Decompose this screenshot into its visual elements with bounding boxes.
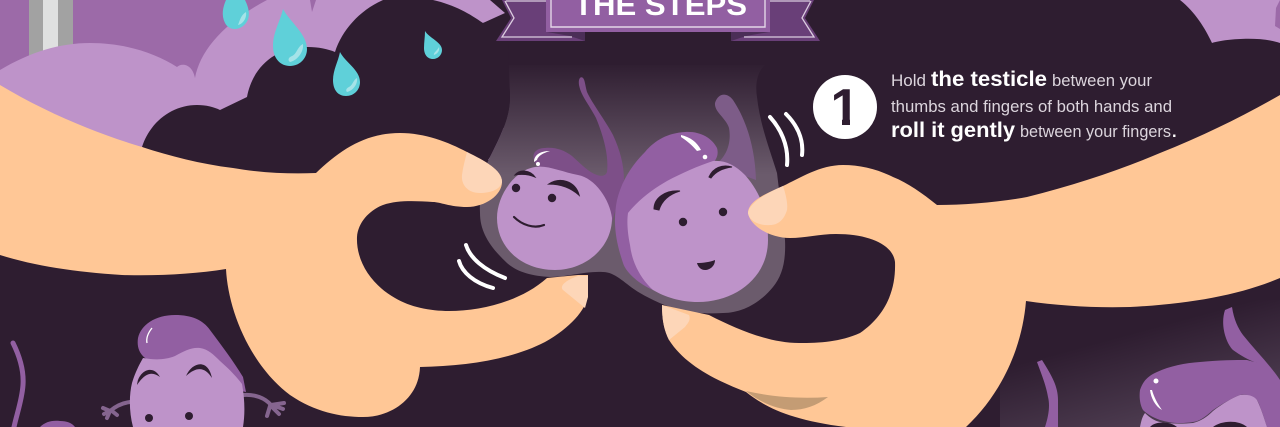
hair highlight: [534, 151, 550, 162]
right eye: [1213, 422, 1247, 427]
number badge: 1: [831, 79, 859, 137]
finger nail: [562, 276, 588, 308]
left eye: [1150, 422, 1177, 427]
head: [627, 161, 768, 302]
number badge: [813, 75, 877, 139]
bottom-right character: [1037, 307, 1280, 427]
epididymis: [615, 132, 760, 290]
palm shadow: [746, 391, 828, 410]
brow right: [549, 181, 579, 195]
hair: [138, 315, 246, 392]
left ribbon tail: [496, 0, 585, 41]
brow left: [654, 191, 680, 210]
step text: Hold: [891, 72, 926, 90]
left testicle character: [497, 77, 624, 270]
face: [1140, 395, 1267, 427]
right testicle character: [615, 95, 768, 302]
tail: [13, 343, 23, 427]
scrotum glow: [480, 65, 785, 313]
motion lines: left: [459, 245, 505, 288]
step text: between your fingers: [1020, 123, 1171, 141]
lilac clouds: [0, 0, 510, 160]
drop 1: [223, 0, 249, 29]
bottom-right glow backdrop: [1000, 300, 1280, 427]
head: [497, 167, 612, 270]
left ribbon outline: [502, 1, 572, 37]
striped post: [29, 0, 73, 56]
left ribbon fold: [547, 32, 585, 41]
step text: between your: [1052, 72, 1152, 90]
right eye: [548, 194, 556, 202]
right ribbon fold: [731, 32, 769, 41]
sky panel: [0, 0, 345, 90]
step text: thumbs and fingers of both hands and: [891, 98, 1172, 116]
tail and hair: [1140, 307, 1280, 427]
brow left: [515, 171, 535, 177]
right hand: [662, 95, 1280, 427]
smile: [514, 217, 544, 227]
right eye: [719, 208, 727, 216]
hair highlight: [681, 135, 701, 151]
cloud: [1180, 0, 1280, 43]
step text: roll it gently: [891, 119, 1015, 142]
highlight dot: [703, 155, 707, 159]
bottom-left character: [13, 315, 284, 427]
right arm: [243, 395, 284, 416]
highlight streak: [1150, 390, 1162, 410]
step text: the testicle: [931, 68, 1047, 91]
finger nail: [662, 305, 690, 340]
step text: .: [1172, 123, 1177, 141]
top-right lilac cloud: [1180, 0, 1280, 43]
epididymis and tail: [533, 77, 624, 222]
body: [130, 348, 244, 427]
sweat drops: [223, 0, 442, 96]
banner inner border: [551, 0, 765, 27]
right eye: [185, 412, 193, 420]
left arm: [103, 402, 130, 418]
left eye: [145, 414, 153, 422]
left eye: [679, 218, 687, 226]
top-left scenery: [0, 0, 510, 160]
drop 2: [273, 9, 307, 66]
left eye: [512, 184, 520, 192]
right brow: [186, 364, 212, 378]
sky sliver: [1275, 0, 1280, 29]
banner: the steps: [496, 0, 820, 41]
highlight dot: [1154, 378, 1158, 384]
motion lines: right: [770, 114, 802, 165]
right ribbon outline: [744, 1, 814, 37]
thumb nail: [462, 152, 502, 193]
left brow: [137, 370, 160, 385]
highlight dot: [536, 162, 540, 166]
dark cloud: [142, 0, 510, 190]
banner plate: [546, 0, 770, 32]
step text: [891, 68, 1177, 142]
drop 4: [424, 31, 442, 59]
hand shape: [0, 85, 588, 417]
left hand: [0, 85, 588, 417]
far tail: [1037, 360, 1058, 427]
second character hair: [40, 421, 75, 427]
step 1: [813, 68, 1177, 142]
drop 3: [333, 52, 360, 96]
right ribbon tail: [731, 0, 820, 41]
mouth: [697, 260, 715, 270]
thumb nail: [748, 186, 787, 225]
tail: [715, 95, 756, 180]
hand shape: [662, 95, 1280, 427]
brow right: [709, 166, 732, 178]
hair highlight: [147, 328, 152, 343]
